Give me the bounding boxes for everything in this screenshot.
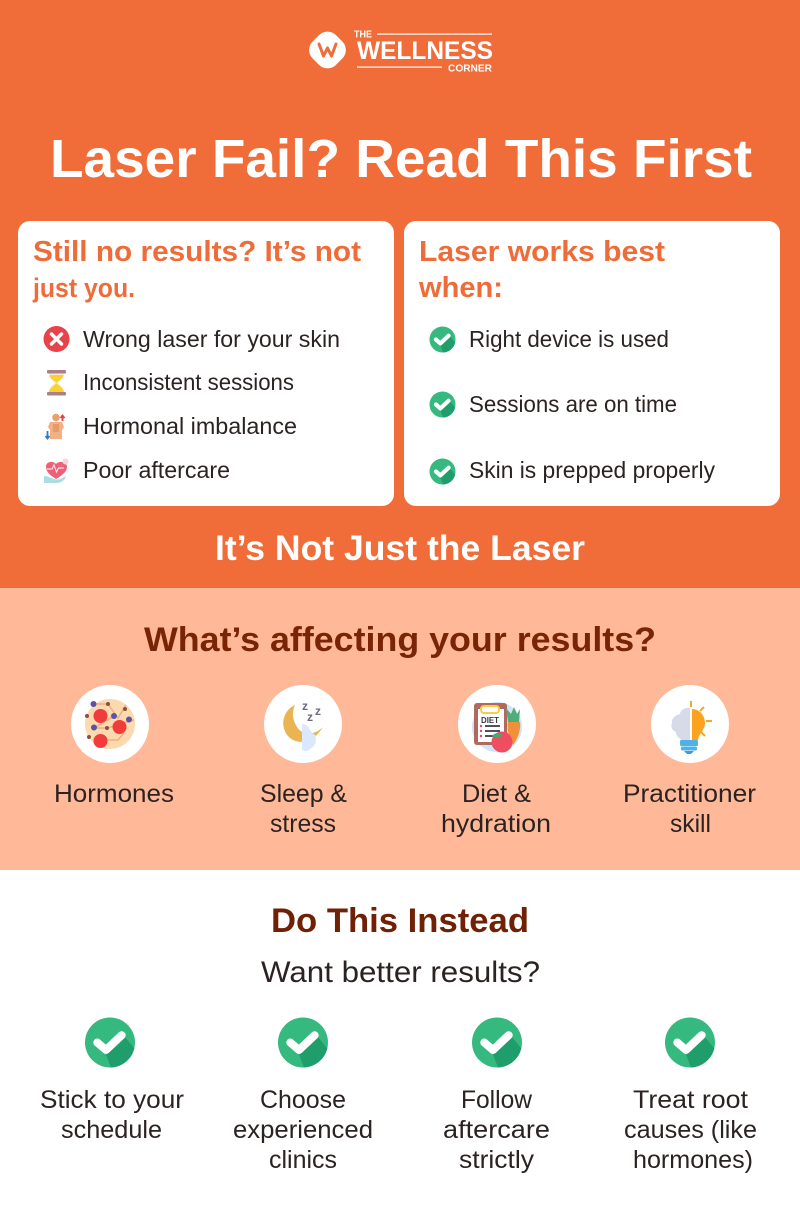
icon: check 2 [278, 1018, 328, 1068]
logo: The Wellness Corner: THE [354, 30, 372, 40]
icon: brain lightbulb [651, 685, 729, 763]
label: diet and hydration: hydration [441, 810, 551, 838]
icon: sleep moon: z [307, 710, 313, 724]
text: wrong laser: Wrong laser for your skin [83, 326, 340, 352]
label: practitioner skill [623, 780, 756, 838]
icon: check 1 [85, 1018, 135, 1068]
icon: red cross [44, 326, 70, 352]
icon: diet: DIET [481, 716, 499, 725]
label: sleep and stress: Sleep & [260, 780, 347, 808]
label: treat root causes: hormones) [633, 1146, 753, 1174]
label: practitioner skill: Practitioner [623, 780, 756, 808]
subheading: want better results: Want better results? [261, 956, 540, 989]
text: poor aftercare: Poor aftercare [83, 457, 230, 483]
label: stick to your schedule: schedule [61, 1116, 162, 1144]
text: hormonal imbalance: Hormonal imbalance [83, 413, 297, 439]
label: follow aftercare strictly: Follow [461, 1086, 533, 1114]
label: treat root causes [624, 1086, 757, 1174]
label: diet and hydration: Diet & [462, 780, 531, 808]
icon: small check [430, 392, 456, 418]
icon: W badge [304, 27, 351, 73]
icon: hormones [71, 685, 149, 763]
label: treat root causes: Treat root [633, 1086, 748, 1114]
subheading: not just the laser: It’s Not Just the Laser [215, 529, 585, 568]
text: skin prepped: Skin is prepped properly [469, 457, 715, 483]
label: follow aftercare strictly [443, 1086, 550, 1174]
icon: hourglass [47, 370, 66, 396]
label: sleep and stress: stress [270, 810, 336, 838]
label: choose experienced clinics [233, 1086, 373, 1174]
icon: hormonal body [46, 414, 64, 439]
logo: The Wellness Corner [304, 27, 493, 75]
icon: sleep moon: z [302, 699, 308, 713]
icon: sleep moon: z [315, 704, 321, 718]
panel: laser works best [404, 221, 780, 506]
heading: do this instead: Do This Instead [271, 902, 529, 940]
icon: diet [458, 685, 536, 763]
label: choose experienced clinics: Choose [260, 1086, 346, 1114]
icon: small check [430, 458, 456, 484]
text: inconsistent sessions: Inconsistent sessions [83, 369, 294, 395]
icon: sleep moon [264, 685, 342, 763]
logo: The Wellness Corner: WELLNESS [357, 37, 493, 65]
icon: heart in hand [44, 458, 68, 483]
icon: small check [430, 326, 456, 352]
label: follow aftercare strictly: aftercare [443, 1116, 550, 1144]
icon: check 4 [665, 1018, 715, 1068]
heading: still no results: Still no results? It’s not [33, 236, 361, 268]
label: follow aftercare strictly: strictly [459, 1146, 535, 1174]
text: right device: Right device is used [469, 326, 669, 352]
panel: what's affecting your results [54, 621, 756, 838]
heading: still no results [32, 236, 361, 303]
label: choose experienced clinics: experienced [233, 1116, 373, 1144]
heading: laser works best [418, 236, 665, 304]
label: treat root causes: causes (like [624, 1116, 757, 1144]
label: diet and hydration [441, 780, 551, 838]
label: sleep and stress [260, 780, 347, 838]
label: stick to your schedule [40, 1086, 184, 1144]
label: hormones: Hormones [54, 780, 174, 808]
heading: still no results: just you. [32, 273, 135, 303]
text: sessions on time: Sessions are on time [469, 391, 677, 417]
heading: laser works best: when: [418, 272, 503, 304]
logo: The Wellness Corner: CORNER [448, 64, 493, 74]
heading: laser works best: Laser works best [419, 236, 665, 268]
panel: still no results [18, 221, 394, 506]
label: stick to your schedule: Stick to your [40, 1086, 184, 1114]
label: choose experienced clinics: clinics [269, 1146, 337, 1174]
icon: check 3 [472, 1018, 522, 1068]
label: practitioner skill: skill [670, 810, 711, 838]
heading: affecting results: What’s affecting your results? [144, 621, 656, 659]
panel: do this instead [40, 902, 757, 1174]
title: Laser Fail? Read This First [50, 129, 752, 189]
